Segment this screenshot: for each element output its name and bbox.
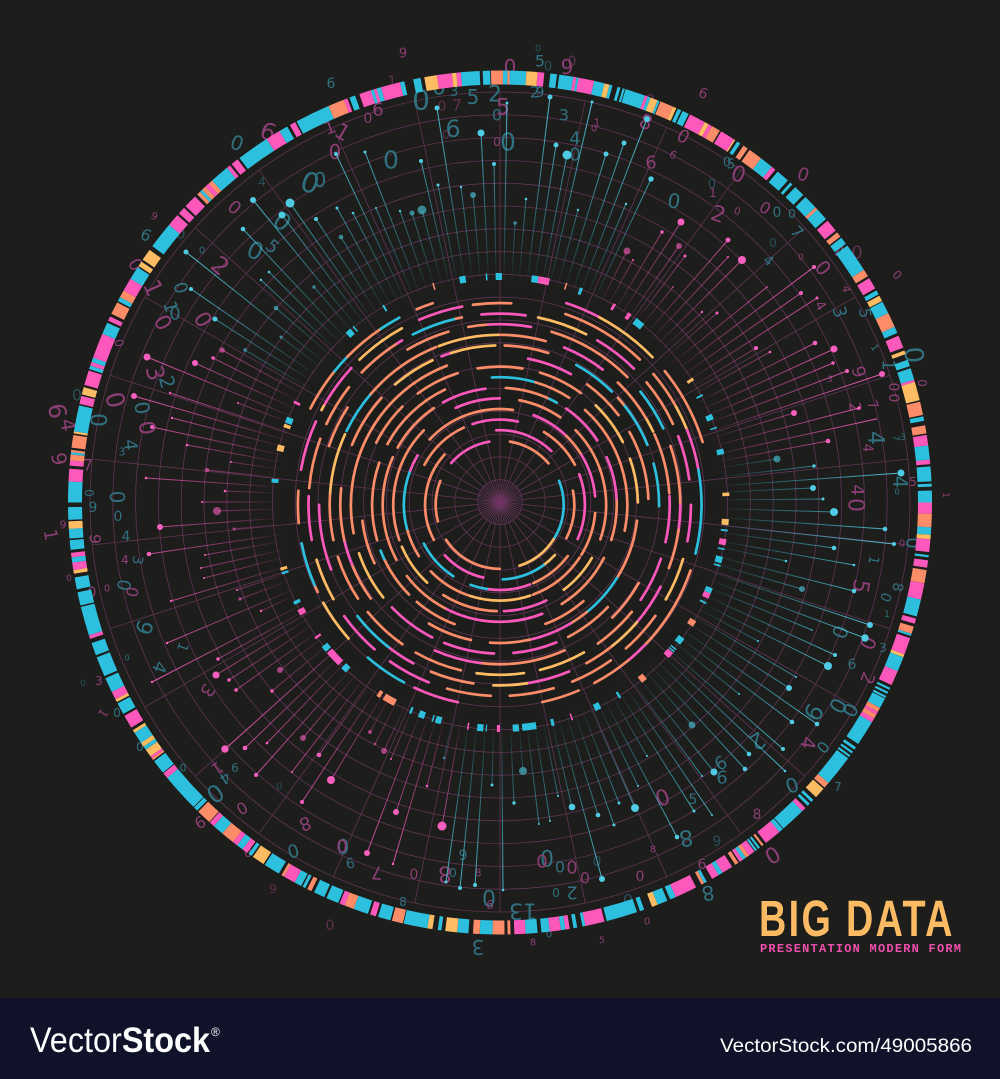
scattered teal digits: 0 — [136, 740, 144, 754]
scattered teal digits: 0 — [666, 188, 682, 214]
scattered pink digits: 0 — [493, 135, 501, 149]
scattered teal digits: 0 — [723, 156, 731, 170]
scattered pink digits: 2 — [205, 250, 235, 282]
scattered pink digits: 8 — [438, 860, 452, 886]
scattered teal digits: 9 — [344, 853, 356, 871]
scattered teal digits: 3 — [900, 433, 906, 443]
scattered teal digits: 0 — [708, 178, 716, 192]
scattered teal digits: 0 — [168, 280, 192, 296]
footer bar — [0, 998, 1000, 1079]
scattered teal digits: 0 — [555, 858, 565, 876]
scattered teal digits: 13 — [509, 898, 537, 922]
scattered teal digits: 4 — [122, 529, 131, 545]
scattered teal digits: 3 — [559, 106, 569, 124]
scattered teal digits: 9 — [89, 500, 97, 516]
scattered teal digits: 2 — [745, 726, 769, 754]
scattered pink digits: 0 — [336, 836, 348, 858]
scattered teal digits: 0 — [124, 654, 130, 662]
scattered teal digits: 3 — [879, 641, 887, 655]
scattered pink digits: 2 — [845, 401, 865, 413]
data point dots: cyan — [184, 94, 904, 891]
scattered teal digits: 0 — [113, 706, 121, 720]
scattered pink digits: 9 — [86, 534, 104, 544]
scattered teal digits: 0 — [314, 168, 326, 192]
scattered pink digits: 5 — [496, 96, 510, 120]
scattered pink digits: 1 — [39, 528, 61, 542]
scattered teal digits: 8 — [677, 823, 695, 851]
scattered teal digits: 8 — [700, 880, 716, 906]
scattered teal digits: 4 — [119, 438, 141, 452]
scattered pink digits: 4 — [811, 298, 829, 314]
scattered teal digits: 7 — [890, 435, 900, 441]
scattered pink digits: 0 — [438, 99, 446, 115]
scattered pink digits: 9 — [60, 518, 66, 532]
scattered pink digits: 0 — [798, 253, 804, 263]
scattered teal digits: 0 — [112, 578, 134, 592]
scattered pink digits: 4 — [839, 284, 853, 294]
scattered teal digits: 0 — [894, 488, 900, 496]
scattered pink digits: 0 — [794, 163, 812, 187]
scattered pink digits: 3 — [827, 375, 833, 385]
scattered teal digits: 0 — [897, 345, 929, 365]
scattered teal digits: 2 — [530, 82, 540, 102]
scattered pink digits: 0 — [442, 128, 450, 142]
scattered pink digits: 0 — [566, 858, 578, 878]
scattered pink digits: 0 — [727, 161, 749, 189]
scattered pink digits: 0 — [756, 197, 774, 219]
scattered teal digits: 5 — [535, 52, 545, 70]
scattered teal digits: 0 — [199, 246, 205, 256]
scattered pink digits: 0 — [645, 90, 655, 110]
scattered teal digits: 4 — [569, 128, 581, 150]
scattered teal digits: 6 — [848, 657, 857, 673]
scattered pink digits: 4 — [834, 242, 846, 264]
scattered teal digits: 5 — [261, 235, 283, 259]
scattered teal digits: 1 — [173, 640, 191, 654]
scattered pink digits: 5 — [846, 577, 874, 595]
scattered pink digits: 0 — [591, 124, 597, 134]
scattered teal digits: 0 — [769, 236, 777, 250]
scattered teal digits: 0 — [482, 888, 496, 912]
scattered pink digits: 9 — [149, 211, 159, 223]
scattered teal digits: 0 — [593, 854, 601, 870]
scattered pink digits: 0 — [364, 111, 372, 127]
scattered teal digits: 5 — [467, 85, 479, 109]
footer logo text: VectorStock — [30, 1021, 210, 1060]
scattered teal digits: 9 — [710, 750, 730, 774]
scattered teal digits: 0 — [432, 76, 446, 100]
scattered pink digits: 0 — [568, 54, 576, 70]
scattered teal digits: 5 — [855, 307, 875, 319]
scattered teal digits: 4 — [258, 175, 266, 189]
scattered teal digits: 9 — [536, 85, 544, 101]
scattered teal digits: 0 — [114, 509, 122, 525]
scattered teal digits: 0 — [552, 886, 560, 900]
scattered teal digits: 3 — [450, 84, 458, 100]
scattered teal digits: 3 — [472, 935, 484, 959]
scattered pink digits — [39, 46, 950, 948]
scattered pink digits: 5 — [599, 936, 605, 946]
scattered pink digits: 0 — [123, 255, 147, 275]
scattered pink digits: 8 — [753, 807, 761, 823]
scattered teal digits: 4 — [862, 431, 888, 445]
scattered teal digits: 9 — [129, 616, 157, 638]
scattered pink digits: 0 — [636, 869, 644, 885]
scattered pink digits: 1 — [95, 706, 111, 720]
scattered pink digits: 0 — [899, 538, 905, 550]
scattered teal digits: 9 — [713, 834, 721, 850]
scattered pink digits: 0 — [855, 633, 881, 653]
scattered teal digits: 6 — [716, 768, 728, 788]
scattered pink digits: 4 — [795, 735, 821, 751]
scattered teal digits — [72, 44, 929, 959]
scattered pink digits: 6 — [698, 857, 707, 873]
scattered teal digits: 0 — [500, 128, 516, 156]
scattered teal digits: 3 — [827, 304, 851, 320]
scattered pink digits: 7 — [863, 398, 881, 412]
scattered pink digits: 0 — [842, 498, 868, 512]
scattered teal digits: 4 — [759, 252, 777, 270]
scattered pink digits: 4 — [846, 484, 868, 496]
scattered pink digits: 0 — [104, 584, 110, 594]
scattered pink digits: 0 — [536, 852, 548, 872]
scattered pink digits: 0 — [111, 337, 127, 349]
scattered pink digits: 4 — [121, 553, 129, 567]
scattered pink digits: 0 — [644, 916, 650, 928]
scattered teal digits: 0 — [337, 835, 349, 859]
scattered teal digits: 0 — [72, 386, 82, 404]
scattered teal digits: 0 — [827, 622, 853, 642]
scattered teal digits: 6 — [137, 224, 155, 246]
scattered teal digits: 0 — [535, 44, 541, 54]
scattered teal digits: 0 — [902, 537, 922, 549]
scattered pink digits: 0 — [760, 840, 784, 868]
scattered teal digits: 6 — [445, 115, 461, 143]
scattered pink digits: 0 — [410, 867, 418, 883]
scattered pink digits: 1 — [137, 275, 169, 301]
scattered teal digits: 0 — [227, 130, 247, 156]
scattered teal digits: 0 — [876, 590, 894, 604]
scattered pink digits: 0 — [889, 267, 905, 283]
scattered teal digits: 0 — [296, 164, 324, 202]
scattered teal digits: 0 — [201, 777, 229, 809]
scattered pink digits: 9 — [191, 811, 209, 833]
scattered teal digits: 0 — [383, 146, 399, 174]
scattered pink digits: 6 — [269, 881, 277, 895]
scattered pink digits: 8 — [650, 844, 656, 856]
scattered pink digits: 7 — [452, 96, 462, 114]
scattered pink digits: 0 — [88, 585, 96, 601]
scattered teal digits: 3 — [118, 446, 126, 458]
scattered pink digits: 0 — [148, 311, 176, 335]
scattered teal digits: 0 — [546, 930, 552, 940]
scattered pink digits: 0 — [851, 242, 863, 264]
scattered teal digits: 7 — [834, 780, 842, 794]
scattered pink digits: 7 — [83, 456, 93, 474]
scattered pink digits: 1 — [594, 116, 600, 130]
footer url text: VectorStock.com/49005866 — [720, 1036, 972, 1057]
scattered pink digits: 1 — [321, 116, 339, 140]
scattered teal digits: 0 — [492, 106, 502, 124]
scattered teal digits: 2 — [488, 82, 502, 108]
scattered teal digits: 0 — [449, 866, 457, 880]
scattered teal digits: 0 — [80, 679, 86, 689]
scattered pink digits: 8 — [474, 866, 482, 880]
scattered pink digits: 0 — [885, 383, 901, 391]
scattered teal digits: 1 — [158, 299, 182, 315]
scattered pink digits: 9 — [399, 46, 407, 62]
scattered teal digits: 4 — [147, 658, 171, 676]
centre hub — [493, 495, 507, 509]
heading: BIG DATA — [759, 889, 955, 947]
scattered pink digits: 0 — [66, 574, 72, 584]
scattered pink digits: 6 — [42, 401, 72, 421]
scattered teal digits: 2 — [154, 373, 180, 391]
scattered teal digits: 0 — [412, 84, 430, 116]
scattered teal digits: 0 — [180, 762, 186, 774]
scattered pink digits: 0 — [223, 196, 245, 220]
scattered teal digits: 0 — [823, 693, 851, 717]
scattered teal digits: 0 — [169, 304, 181, 324]
scattered teal digits: 0 — [788, 207, 796, 221]
scattered pink digits: 8 — [296, 811, 314, 835]
scattered pink digits: 0 — [188, 308, 216, 332]
inner concentric dashed arcs — [199, 204, 800, 805]
scattered pink digits: 0 — [326, 918, 334, 934]
scattered teal digits: 1 — [868, 342, 880, 354]
scattered teal digits: 5 — [727, 158, 735, 172]
scattered pink digits: 0 — [329, 140, 341, 164]
radial grid — [90, 92, 910, 912]
footer logo registered mark: ® — [211, 1025, 220, 1039]
scattered teal digits: 6 — [231, 761, 239, 775]
scattered pink digits: 0 — [504, 55, 516, 79]
scattered pink digits: 2 — [707, 201, 729, 229]
scattered teal digits: 0 — [276, 782, 282, 792]
scattered pink digits: 0 — [810, 255, 836, 281]
scattered teal digits: 0 — [242, 235, 268, 267]
scattered pink digits: 0 — [673, 125, 693, 149]
scattered pink digits: 9 — [561, 55, 573, 79]
scattered pink digits: 0 — [885, 394, 901, 402]
scattered teal digits: 0 — [623, 890, 633, 910]
scattered teal digits: 0 — [285, 838, 301, 862]
scattered pink digits: 0 — [122, 585, 142, 599]
scattered teal digits: 4 — [216, 767, 234, 789]
scattered pink digits: 1 — [207, 757, 227, 779]
scattered pink digits: 0 — [915, 379, 929, 387]
scattered teal digits: 0 — [129, 400, 155, 416]
scattered pink digits: 1 — [388, 74, 396, 90]
scattered teal digits: 0 — [773, 205, 781, 221]
scattered pink digits: 7 — [370, 861, 384, 883]
scattered teal digits: 6 — [327, 76, 336, 92]
scattered pink digits: 8 — [530, 938, 536, 948]
scattered pink digits: 9 — [846, 364, 870, 380]
scattered teal digits: 1 — [884, 610, 890, 620]
scattered teal digits: 4 — [888, 476, 912, 488]
scattered teal digits: 8 — [888, 581, 906, 593]
radial data lines: pink — [134, 222, 882, 864]
scattered pink digits: 0 — [580, 868, 590, 888]
scattered teal digits: 0 — [569, 144, 581, 166]
scattered teal digits: 0 — [177, 227, 185, 243]
scattered teal digits: 0 — [812, 737, 834, 757]
scattered pink digits: 0 — [132, 419, 160, 437]
scattered pink digits: 6 — [372, 100, 384, 120]
scattered teal digits: 0 — [782, 772, 802, 798]
scattered pink digits: 3 — [139, 362, 171, 384]
scattered teal digits: 8 — [399, 895, 407, 909]
scattered teal digits: 0 — [105, 491, 129, 503]
scattered teal digits: 7 — [786, 222, 808, 242]
scattered pink digits: 1 — [940, 492, 950, 498]
scattered teal digits: 0 — [84, 413, 110, 427]
scattered pink digits: 9 — [46, 451, 72, 467]
scattered pink digits: 2 — [855, 669, 879, 687]
scattered pink digits: 0 — [651, 782, 673, 810]
scattered pink digits: 6 — [486, 898, 494, 912]
scattered teal digits: 9 — [459, 848, 467, 864]
scattered teal digits: 0 — [82, 489, 96, 497]
scattered teal digits: 3 — [129, 555, 145, 565]
scattered pink digits: 0 — [732, 206, 742, 218]
scattered pink digits: 4 — [55, 417, 81, 433]
data point dots: pink — [131, 218, 885, 865]
scattered pink digits: 0 — [244, 846, 252, 860]
scattered pink digits: 5 — [909, 475, 917, 489]
scattered pink digits: 4 — [859, 444, 875, 453]
scattered teal digits: 0 — [267, 206, 297, 238]
scattered pink digits: 0 — [99, 389, 131, 411]
scattered teal digits: 0 — [540, 848, 554, 872]
scattered teal digits: 9 — [797, 698, 829, 726]
scattered pink digits: 3 — [95, 674, 103, 688]
scattered pink digits: 6 — [645, 152, 657, 174]
scattered teal digits: 2 — [566, 882, 578, 902]
scattered pink digits: 3 — [195, 679, 219, 701]
scattered teal digits: 0 — [544, 60, 552, 74]
scattered teal digits: 1 — [864, 554, 882, 566]
scattered teal digits: 0 — [836, 698, 864, 722]
scattered pink digits: 6 — [667, 148, 679, 162]
scattered pink digits: 1 — [330, 119, 354, 147]
scattered pink digits: 8 — [636, 109, 656, 135]
small block ring — [180, 183, 820, 822]
scattered pink digits: 1 — [709, 186, 717, 200]
scattered pink digits: 6 — [256, 116, 280, 148]
scattered pink digits: 6 — [696, 85, 710, 103]
title block — [759, 889, 961, 956]
scattered teal digits: 1 — [878, 359, 898, 371]
scattered pink digits: 0 — [233, 797, 251, 819]
subtitle: PRESENTATION MODERN FORM — [760, 942, 961, 956]
scattered teal digits: 5 — [689, 792, 697, 808]
radial data lines: cyan — [186, 97, 901, 890]
